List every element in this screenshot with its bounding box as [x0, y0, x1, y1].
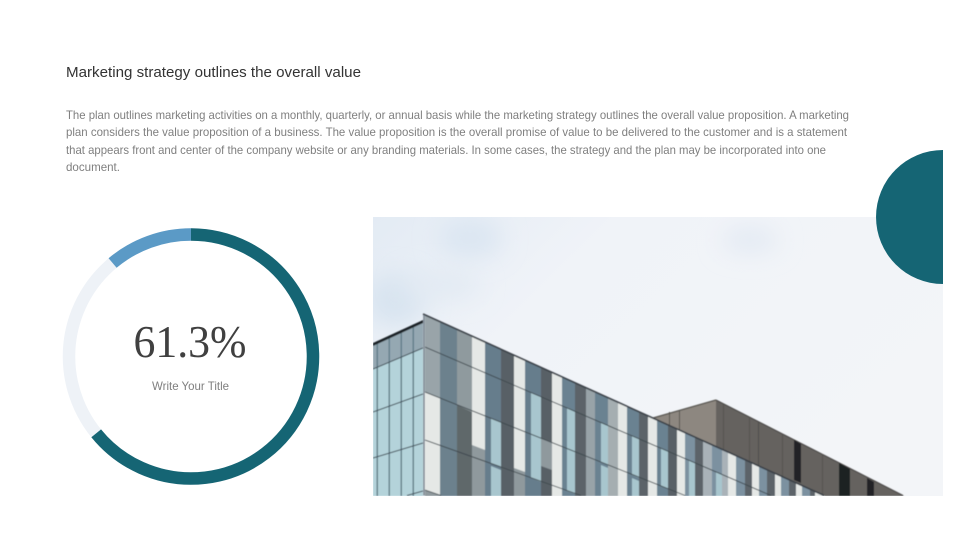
decorative teal half circle [876, 150, 943, 284]
photo: office building against the sky [365, 217, 943, 496]
donut chart: 61.3% [69, 234, 313, 478]
upper building block [653, 400, 904, 496]
title: Marketing strategy outlines the overall value [66, 64, 361, 81]
donut blue segment [113, 234, 191, 263]
donut caption: Write Your Title [152, 379, 229, 393]
facade roof edge [423, 314, 824, 496]
main facade [425, 315, 825, 496]
facade floor lines [425, 347, 771, 496]
body text block: The plan outlines marketing activities on a monthly, quarterly, or annual basis while the marketing strategy outlines the overall value proposition. A marketing [66, 108, 849, 122]
facade spandrel panels [472, 438, 552, 496]
body text block: document. [66, 160, 120, 174]
body text block: plan considers the value proposition of a business. The value proposition is the overall promise of value to be delivered to the customer and is a statement [66, 125, 848, 139]
facade columns [425, 315, 815, 496]
donut dark teal segment [96, 234, 313, 478]
facade light windows [491, 393, 722, 496]
body text block [66, 108, 849, 174]
donut track segment [69, 234, 313, 478]
body text block: that appears front and center of the company website or any branding materials. In some cases, the strategy and the plan may be incorporated into one [66, 143, 826, 157]
left glass wing [373, 319, 423, 496]
percentage value: 61.3% [134, 316, 246, 367]
building corner [423, 315, 425, 496]
